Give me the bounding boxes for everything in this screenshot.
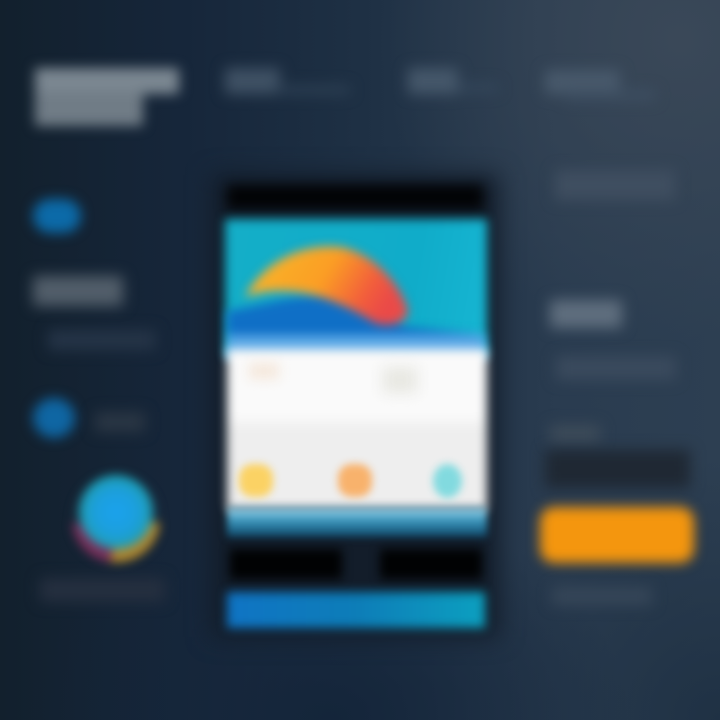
button caption bbox=[552, 587, 652, 605]
donut caption bbox=[40, 578, 165, 602]
phone bottom bar left bbox=[230, 549, 342, 579]
screen header: teal bbox=[225, 219, 487, 356]
icon: blue pill bbox=[33, 199, 81, 233]
screen lower band bbox=[227, 507, 487, 537]
phone shadow bbox=[211, 175, 499, 637]
right field label bbox=[550, 425, 600, 443]
title block bbox=[27, 60, 187, 134]
phone top bar bbox=[227, 185, 483, 209]
donut chart bbox=[67, 468, 166, 570]
icon: blue circle bbox=[33, 398, 75, 438]
icon: yellow circle bbox=[239, 464, 273, 497]
right description bbox=[556, 356, 676, 380]
right heading bbox=[555, 170, 675, 200]
left label two bbox=[95, 412, 145, 432]
phone bbox=[210, 166, 509, 644]
right main label bbox=[550, 300, 622, 328]
icon: teal circle bbox=[433, 464, 462, 498]
left caption one bbox=[48, 330, 156, 350]
dark input field bbox=[545, 450, 690, 488]
left label one bbox=[33, 276, 123, 306]
card detail left bbox=[249, 363, 279, 379]
icon: orange circle bbox=[338, 464, 372, 497]
phone bottom bar right bbox=[380, 549, 482, 579]
wave illustration bbox=[220, 238, 492, 364]
card detail right bbox=[383, 367, 417, 393]
orange button bbox=[540, 507, 694, 563]
blue action bar bbox=[227, 592, 485, 628]
screen body: white card bbox=[227, 349, 487, 509]
top navigation labels bbox=[220, 62, 624, 100]
